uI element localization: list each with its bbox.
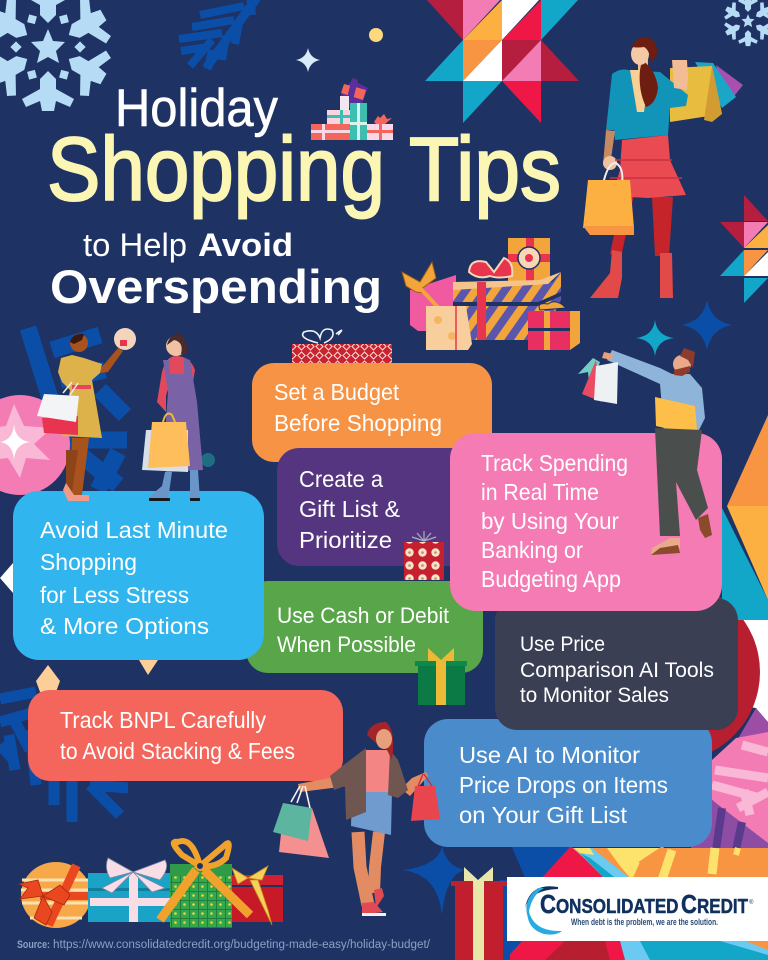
panel: green cash or debit — [246, 581, 483, 673]
snowflake: top left — [0, 0, 116, 111]
panel: blue price drops: Use AI to Monitor — [459, 742, 640, 768]
title — [47, 79, 561, 313]
logo: ® — [749, 899, 754, 906]
sparkles and dot — [201, 28, 732, 467]
panel: pink track spending: Banking or — [481, 537, 583, 563]
gift: red pattern — [292, 329, 392, 363]
title: Avoid — [198, 227, 293, 263]
geometric star: right — [720, 195, 768, 303]
panel: dark price comparison: to Monitor Sales — [520, 684, 669, 707]
panel: pink track spending: in Real Time — [481, 479, 599, 505]
panel: dark price comparison: Comparison AI Tools — [520, 659, 714, 682]
panel: pink track spending: Track Spending — [481, 450, 628, 476]
title: Shopping — [47, 120, 385, 220]
title: to Help — [83, 227, 187, 263]
panel: cyan last minute: & More Options — [40, 613, 209, 639]
right geometric background — [580, 415, 768, 850]
panel: gift list: Gift List & — [299, 496, 400, 522]
panel: set a budget — [252, 363, 492, 462]
gift: bottom row — [19, 841, 283, 928]
illustration: man with bags — [578, 348, 712, 555]
panel: cyan last minute: Avoid Last Minute — [40, 517, 228, 543]
illustration: two women shopping — [37, 328, 203, 501]
ornament: pink — [0, 395, 70, 495]
panel: dark price comparison — [495, 598, 738, 730]
panel: blue price drops: on Your Gift List — [459, 802, 627, 828]
blue snowflake: lower left — [0, 692, 128, 822]
panel: gift list: Create a — [299, 466, 384, 492]
panel: cyan last minute: Shopping — [40, 549, 137, 575]
title: Tips — [409, 120, 561, 220]
panel: cyan last minute — [13, 491, 264, 660]
logo — [507, 877, 768, 941]
panel: gift list — [277, 448, 477, 566]
gift: red with flowers — [404, 531, 444, 580]
blue snowflake: left — [28, 328, 127, 490]
illustration: woman with shopping bags — [583, 37, 743, 298]
panel: pink track spending — [450, 433, 722, 611]
title: Overspending — [50, 260, 382, 313]
panel: coral bnpl: Track BNPL Carefully — [60, 707, 266, 733]
logo: CONSOLIDATEDCREDIT — [540, 889, 748, 919]
snowflake: top right — [721, 0, 768, 46]
panel: blue price drops: Price Drops on Items — [459, 772, 668, 798]
illustration: woman with bags bottom — [273, 722, 440, 916]
source line: Source: — [17, 939, 50, 951]
panel: coral bnpl: to Avoid Stacking & Fees — [60, 738, 295, 764]
panel: gift list: Prioritize — [299, 527, 392, 553]
panel: set a budget: Set a Budget — [274, 379, 399, 405]
icon: logo swoosh — [525, 886, 562, 935]
panel: cyan last minute: for Less Stress — [40, 582, 189, 608]
panel: green cash or debit: Use Cash or Debit — [277, 603, 449, 628]
title: Holiday — [115, 79, 278, 138]
bottom right geometric background — [402, 846, 768, 960]
panel: pink track spending: by Using Your — [481, 508, 619, 534]
panel: coral bnpl — [28, 690, 343, 781]
panel: blue price drops — [424, 719, 712, 847]
gift: red bottom — [451, 867, 507, 960]
blue feather: top — [179, 0, 258, 69]
geometric star: top — [425, 0, 579, 123]
panel: green cash or debit: When Possible — [277, 632, 416, 657]
panel: set a budget: Before Shopping — [274, 410, 442, 436]
panel: pink track spending: Budgeting App — [481, 566, 621, 592]
gift: green — [415, 648, 467, 705]
source line: https://www.consolidatedcredit.org/budgeting-made-easy/holiday-budget/ — [53, 939, 431, 951]
icon: small gift stack — [311, 78, 393, 140]
white and peach diamonds — [0, 563, 158, 692]
icon: large gift pile — [402, 238, 580, 350]
panel: dark price comparison: Use Price — [520, 633, 605, 656]
